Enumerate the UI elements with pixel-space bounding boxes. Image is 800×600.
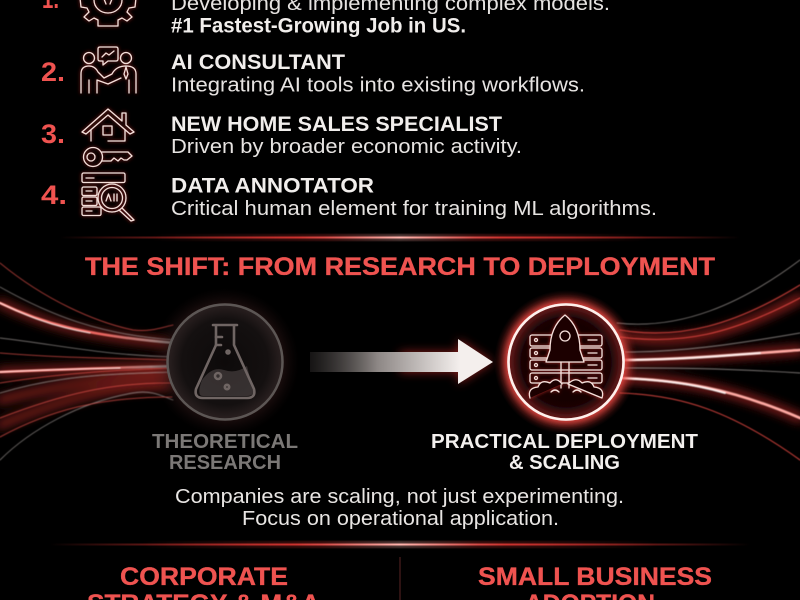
- icon: house and key: [82, 109, 134, 166]
- job 4: description: Critical human element for training ML algorithms.: [171, 198, 657, 220]
- label: theoretical research: THEORETICAL: [152, 431, 298, 453]
- label: practical deployment: & SCALING: [509, 452, 620, 474]
- panel: the shift: [0, 253, 800, 530]
- panel: small business adoption: SMALL BUSINESS: [478, 563, 712, 591]
- icon: data search: [82, 173, 134, 221]
- theoretical research node: [151, 288, 299, 436]
- practical deployment node: [494, 290, 638, 434]
- icon: gear with code: [80, 0, 136, 26]
- job 4: number: 4.: [41, 180, 67, 210]
- job 3: number: 3.: [41, 119, 65, 149]
- chart: left light streams: [0, 263, 175, 460]
- label: theoretical research: RESEARCH: [169, 452, 281, 474]
- label: theoretical research: [152, 431, 298, 474]
- icon: handshake consultants: [81, 47, 136, 93]
- panel: corporate strategy: [87, 563, 320, 600]
- panel: top jobs list: [41, 0, 657, 221]
- chart: right light streams: [617, 260, 800, 460]
- shift summary text: Focus on operational application.: [242, 508, 559, 530]
- job 2: title: AI CONSULTANT: [171, 51, 345, 74]
- panel: corporate strategy: CORPORATE: [120, 563, 288, 591]
- job 4: title: DATA ANNOTATOR: [171, 174, 374, 198]
- job 3: title: NEW HOME SALES SPECIALIST: [171, 113, 502, 136]
- job 3: description: Driven by broader economic activity.: [171, 136, 522, 158]
- icon: rocket and servers: [529, 315, 603, 398]
- arrow: research to deployment: [310, 339, 493, 384]
- icon: flask: [196, 325, 254, 398]
- job 2: number: 2.: [41, 57, 65, 87]
- label: practical deployment: PRACTICAL DEPLOYMENT: [431, 431, 698, 453]
- shift summary text: Companies are scaling, not just experimenting.: [175, 486, 624, 508]
- shift summary text: [175, 486, 624, 530]
- job 2: description: Integrating AI tools into existing workflows.: [171, 74, 585, 96]
- label: practical deployment: [431, 431, 698, 474]
- heading: THE SHIFT: FROM RESEARCH TO DEPLOYMENT: [85, 253, 715, 281]
- job 1: highlight: #1 Fastest-Growing Job in US.: [171, 14, 466, 38]
